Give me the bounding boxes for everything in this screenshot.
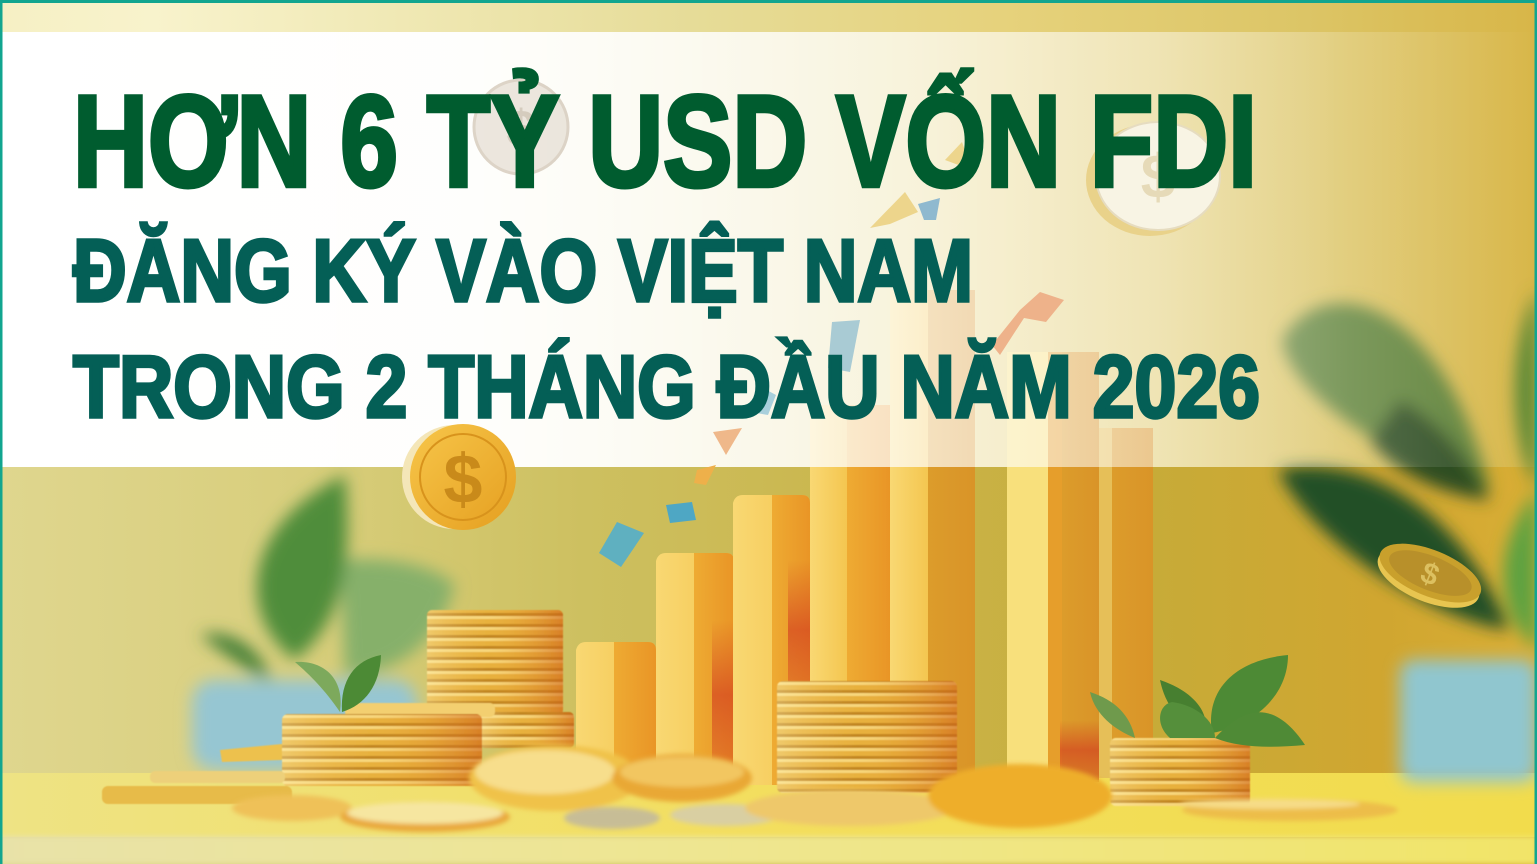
blurred plant right [1278, 290, 1537, 782]
title line 1: HƠN 6 TỶ USD VỐN FDI [73, 68, 1257, 214]
title line 3: TRONG 2 THÁNG ĐẦU NĂM 2026 [73, 337, 1260, 436]
coin stack left [102, 610, 574, 804]
coin: pale coin top: $ [507, 100, 536, 158]
bar 1 [576, 642, 656, 770]
bar chart of gold columns [576, 290, 1153, 790]
coin: gold dollar: $ [444, 440, 482, 518]
scattered coins on table [232, 745, 1398, 832]
white title panel [0, 32, 1537, 467]
floating arrow fragments [599, 142, 1064, 567]
coin stack right [1110, 738, 1250, 806]
bar 2 [656, 553, 734, 775]
coin: white coin right: $ [1141, 143, 1175, 212]
coin: pale coin top [474, 80, 568, 174]
coin: gold dollar [402, 424, 516, 530]
coin stack middle [777, 681, 957, 793]
bar 5 [1007, 352, 1153, 782]
coin: white coin right [1086, 122, 1220, 236]
bar 4 [810, 290, 975, 790]
blurred plant left [192, 475, 455, 770]
sprout right [1090, 655, 1305, 747]
bar 3 [733, 495, 810, 785]
title line 2: ĐĂNG KÝ VÀO VIỆT NAM [73, 221, 973, 320]
sprout left [295, 655, 381, 712]
title [73, 68, 1260, 436]
coin: tilted right: $ [1416, 556, 1444, 593]
coin: tilted right [1369, 532, 1489, 620]
